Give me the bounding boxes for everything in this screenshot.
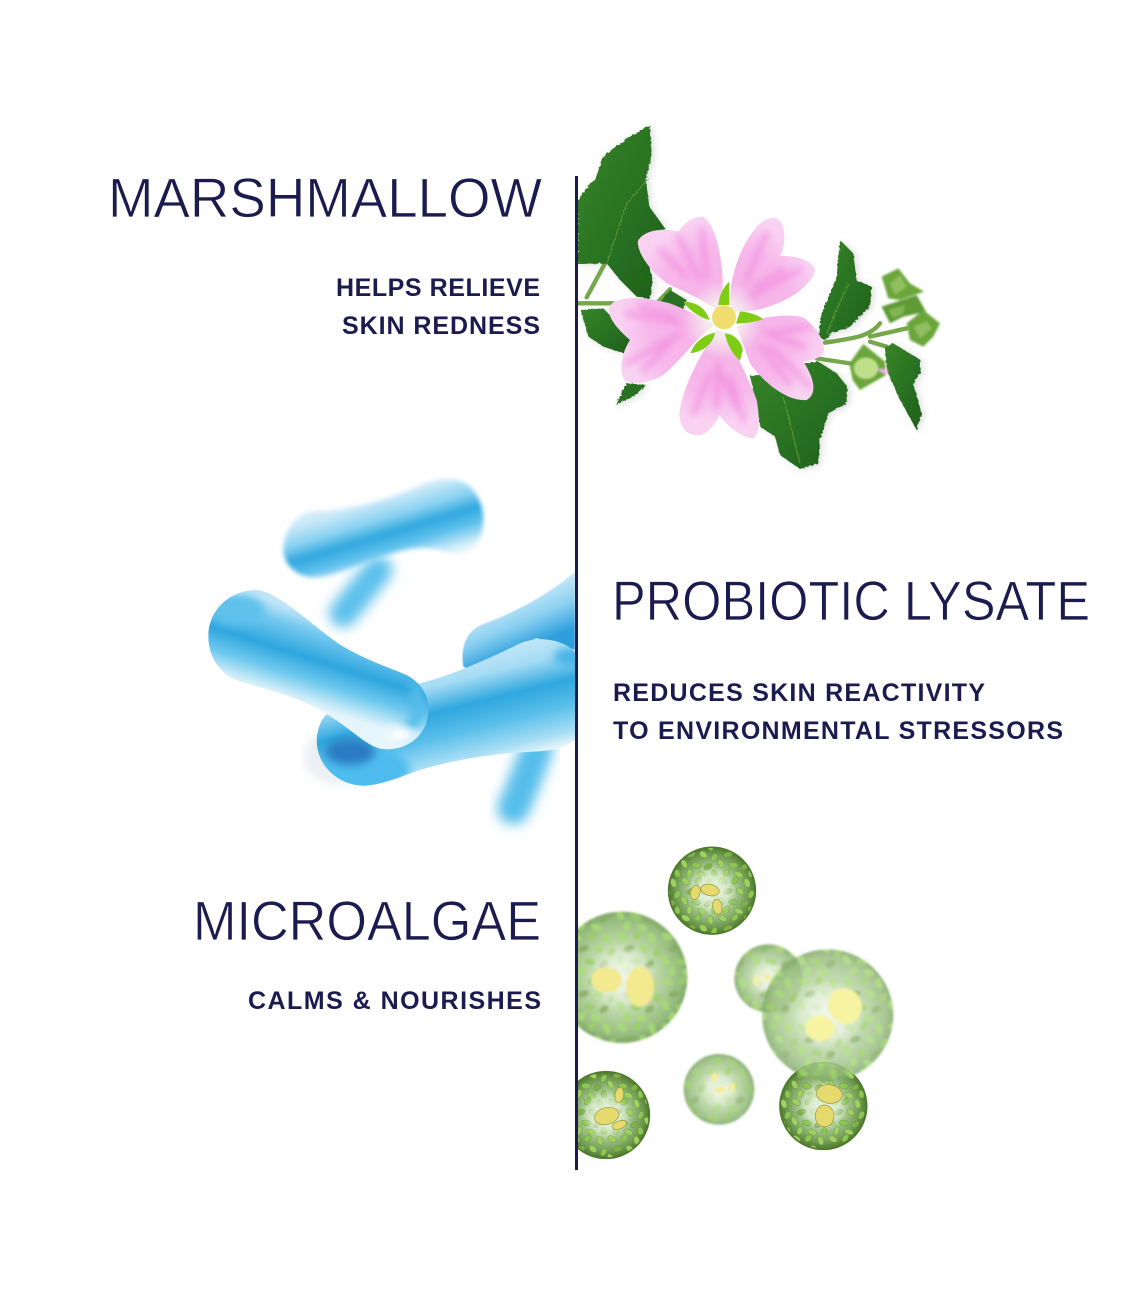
flower centre (712, 305, 736, 329)
heading: microalgae: MICROALGAE (193, 889, 541, 952)
buds (849, 268, 940, 390)
rear right rod (462, 572, 575, 668)
text: helps relieve skin redness: HELPS RELIEVE (336, 274, 540, 302)
blurred cell: behind right (734, 944, 802, 1012)
panel: microalgae text (193, 889, 541, 1015)
leaves (578, 125, 922, 469)
sharp cell: bottom left (578, 1070, 650, 1160)
blurred cell: large right (762, 949, 893, 1081)
petals (609, 217, 824, 438)
illustration: marshmallow flower (578, 125, 940, 469)
heading: marshmallow: MARSHMALLOW (108, 166, 542, 229)
panel: probiotic lysate text (612, 569, 1090, 745)
heading: probiotic lysate: PROBIOTIC LYSATE (612, 569, 1090, 632)
petal streaks (627, 230, 810, 420)
sharp cell: bottom right (780, 1063, 867, 1149)
front left rod (208, 590, 428, 750)
blurred cell: large left (578, 910, 689, 1044)
sharp cell: top (669, 847, 755, 934)
small blurred rods (343, 570, 537, 808)
text: reduces skin reactivity (613, 679, 1063, 745)
panel: marshmallow text (108, 166, 542, 340)
stems (578, 263, 907, 363)
text: reduces skin reactivity: TO ENVIRONMENTAL STRESSORS (613, 717, 1063, 745)
sepals (683, 282, 763, 361)
text: helps relieve skin redness (336, 274, 540, 340)
blurred cell: small bottom (684, 1054, 754, 1125)
illustration: probiotic bacteria (200, 479, 593, 808)
text: calms and nourishes: CALMS & NOURISHES (248, 987, 541, 1015)
soft shadow (303, 734, 350, 786)
central vertical divider (575, 176, 578, 1170)
top blurred rod (283, 479, 483, 577)
text: helps relieve skin redness: SKIN REDNESS (342, 312, 540, 340)
text: reduces skin reactivity: REDUCES SKIN REACTIVITY (613, 679, 985, 707)
front right rod (316, 639, 575, 786)
illustration: microalgae cells (556, 847, 893, 1158)
